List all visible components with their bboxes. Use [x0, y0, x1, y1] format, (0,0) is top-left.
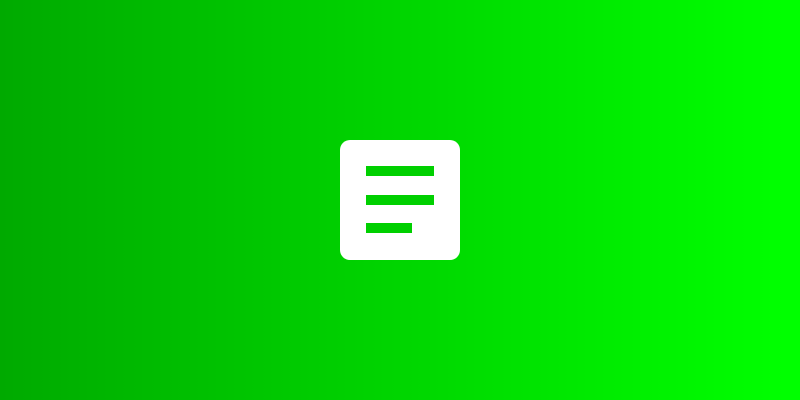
- icon line: top bar: [366, 166, 434, 176]
- icon: document with text lines: [340, 140, 460, 260]
- icon line: short bottom bar: [366, 223, 412, 233]
- icon line: middle bar: [366, 195, 434, 205]
